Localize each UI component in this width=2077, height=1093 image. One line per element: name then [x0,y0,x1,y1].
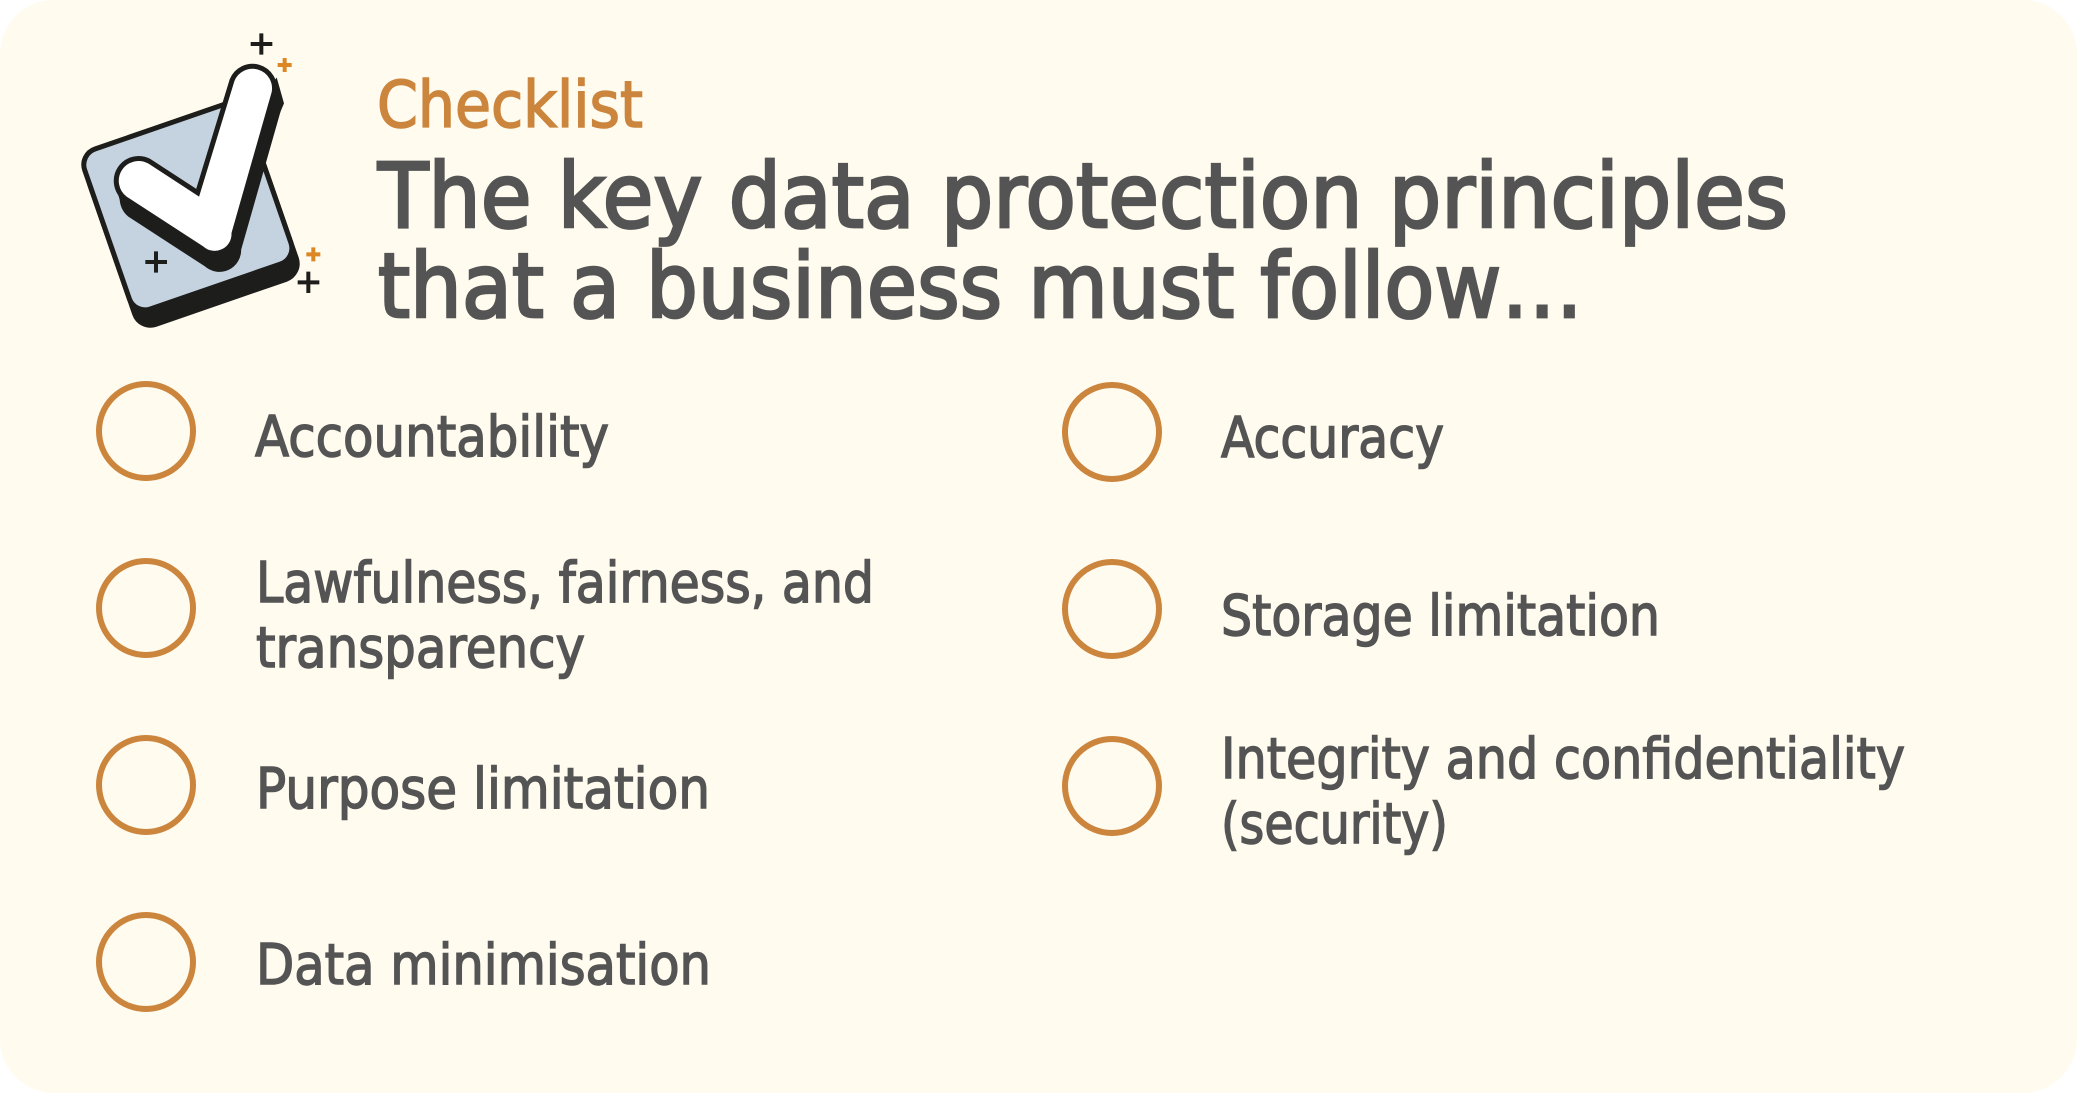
item: Data minimisation [99,915,711,1009]
title: that a business must follow… [378,234,1583,338]
item: Accuracy: Accuracy [1221,406,1444,471]
item: Storage limitation [1065,562,1660,656]
item: Data minimisation: Data minimisation [256,933,711,998]
item: Accountability: Accountability [255,405,609,470]
eyebrow: Checklist: Checklist [377,69,643,143]
item: Integrity and confidentiality (security): (security) [1221,792,1448,857]
icon: checklist tick [84,33,320,325]
item: Accuracy [1065,385,1444,479]
item: Accountability [99,384,609,478]
item: Storage limitation: Storage limitation [1221,584,1660,649]
title: The key data protection principles [377,144,1788,248]
item: Purpose limitation: Purpose limitation [256,757,710,822]
item: Lawfulness, fairness, and transparency: Lawfulness, fairness, and [256,551,874,616]
title [377,144,1788,338]
item: Integrity and confidentiality (security): Integrity and confidentiality [1221,727,1905,792]
item: Purpose limitation [99,738,710,832]
item: Lawfulness, fairness, and transparency [99,551,874,681]
item: Integrity and confidentiality (security) [1065,727,1905,857]
item: Lawfulness, fairness, and transparency: transparency [256,616,585,681]
